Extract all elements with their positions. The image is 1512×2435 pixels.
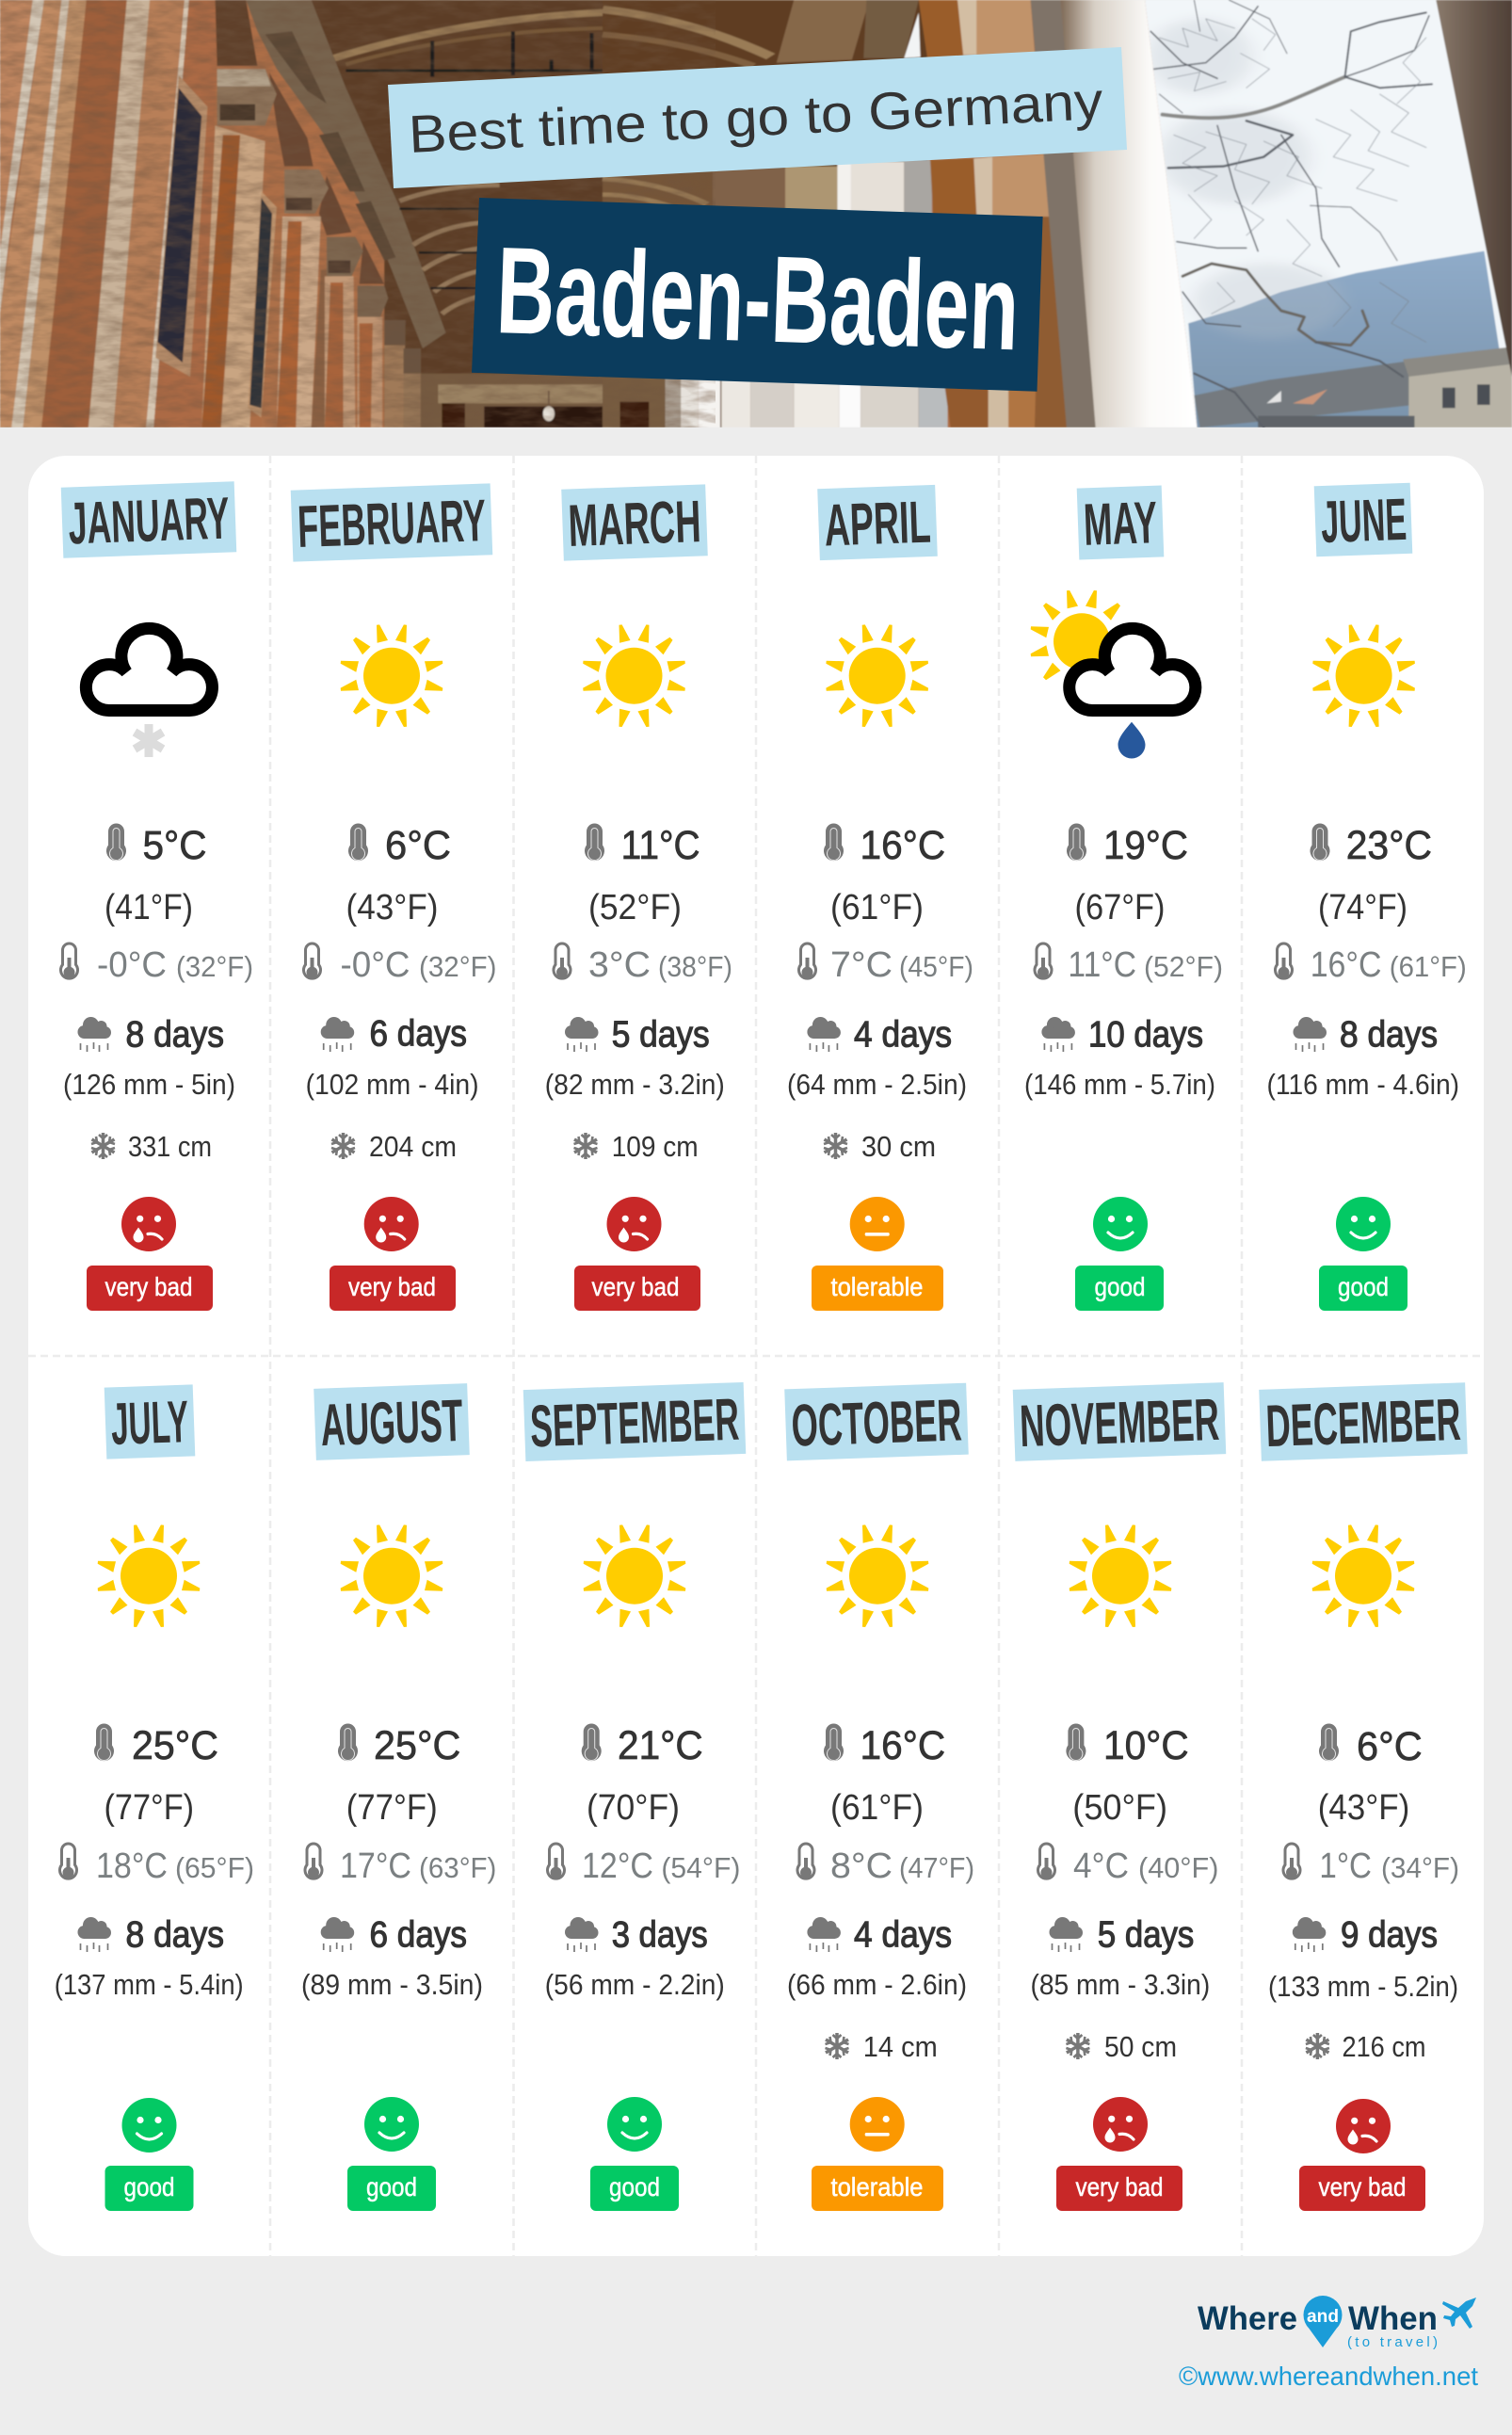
logo: Where and When (to travel): and	[1307, 2307, 1339, 2327]
average high temperature: 11°C	[621, 823, 700, 868]
rainfall: (56 mm - 2.2in)	[545, 1968, 725, 2001]
panel: monthly climate card	[28, 456, 1484, 2256]
average low temperature	[554, 943, 732, 985]
rating: very bad	[330, 1197, 456, 1311]
heading: June	[1314, 483, 1412, 556]
rainfall: (116 mm - 4.6in)	[1267, 1068, 1459, 1101]
average low temperature	[798, 943, 973, 985]
average low temperature: (63°F)	[419, 1851, 496, 1884]
average high temperature: (52°F)	[588, 888, 682, 927]
month: February	[291, 483, 497, 1311]
heading: January: JANUARY	[67, 486, 231, 556]
average high temperature: (61°F)	[830, 888, 924, 927]
average low temperature: 18°C	[96, 1846, 168, 1886]
icon: sun	[826, 624, 928, 727]
heading: April: APRIL	[823, 490, 932, 558]
average low temperature	[60, 943, 253, 985]
snowfall	[574, 1130, 699, 1163]
heading: March: MARCH	[567, 489, 702, 559]
snowfall: 331 cm	[128, 1130, 212, 1163]
month: November	[1013, 1382, 1226, 2211]
heading: August: AUGUST	[319, 1388, 464, 1459]
rating: good	[105, 2098, 194, 2211]
heading: November: NOVEMBER	[1019, 1387, 1220, 1459]
icon: sun	[1312, 1524, 1414, 1627]
average low temperature: 11°C	[1068, 945, 1136, 985]
average high temperature: (50°F)	[1072, 1788, 1167, 1828]
icon: cloud with snow	[86, 628, 212, 757]
average high temperature	[585, 823, 700, 927]
title banner: Baden-Baden	[472, 198, 1043, 392]
average low temperature: (40°F)	[1138, 1851, 1218, 1884]
average high temperature	[338, 1723, 460, 1828]
title banner: Best time to go to Germany: Best time to go to Germany	[408, 71, 1104, 164]
rating: tolerable	[812, 2097, 943, 2211]
rainfall	[1024, 1015, 1215, 1101]
rainfall: 5 days	[612, 1015, 710, 1055]
snowfall: 109 cm	[612, 1130, 699, 1163]
heading: July: JULY	[110, 1389, 189, 1458]
snowfall: 204 cm	[369, 1130, 457, 1163]
month: June	[1267, 483, 1467, 1311]
average high temperature	[105, 823, 207, 927]
rainfall: 4 days	[854, 1015, 952, 1055]
average low temperature	[1283, 1844, 1459, 1886]
average high temperature: (61°F)	[830, 1788, 924, 1828]
average high temperature: (41°F)	[105, 888, 193, 927]
rainfall: (137 mm - 5.4in)	[55, 1968, 244, 2001]
average low temperature: (52°F)	[1144, 950, 1223, 983]
rainfall: 9 days	[1341, 1915, 1438, 1955]
rainfall: (64 mm - 2.5in)	[787, 1068, 967, 1101]
snowfall	[824, 1130, 936, 1163]
average high temperature: 21°C	[618, 1723, 703, 1768]
logo: Where and When (to travel): Where	[1198, 2300, 1297, 2337]
average high temperature: 6°C	[1357, 1724, 1423, 1769]
rating: tolerable: tolerable	[830, 1272, 923, 1301]
average high temperature	[824, 823, 945, 927]
rating: good	[347, 2097, 436, 2211]
average low temperature: (47°F)	[899, 1851, 974, 1884]
rainfall	[301, 1915, 483, 2001]
rating: good	[1075, 1197, 1164, 1311]
average low temperature: 12°C	[582, 1846, 653, 1886]
average low temperature: 1°C	[1319, 1846, 1372, 1886]
average high temperature: 25°C	[374, 1723, 460, 1768]
average high temperature: (43°F)	[346, 888, 439, 927]
heading: April	[817, 485, 938, 560]
logo: Where and When (to travel): (to travel)	[1347, 2334, 1438, 2350]
rainfall: 6 days	[369, 1013, 467, 1055]
snowfall	[1066, 2030, 1177, 2063]
month: October	[784, 1383, 974, 2211]
rainfall: 8 days	[126, 1015, 224, 1055]
average low temperature	[1275, 943, 1467, 985]
average high temperature	[824, 1723, 945, 1828]
snowfall: 14 cm	[863, 2030, 938, 2063]
month: January	[60, 481, 253, 1311]
rainfall: (66 mm - 2.6in)	[787, 1968, 967, 2001]
rating: very bad: very bad	[591, 1272, 680, 1301]
average high temperature: 16°C	[861, 1723, 945, 1768]
rating: good: good	[1338, 1272, 1389, 1301]
rainfall	[545, 1015, 725, 1101]
average low temperature	[797, 1844, 974, 1886]
icon: sun, cloud and rain drop	[1031, 590, 1196, 759]
heading: September	[523, 1382, 746, 1461]
rainfall: (85 mm - 3.3in)	[1030, 1968, 1210, 2001]
average low temperature: (45°F)	[899, 950, 973, 983]
average low temperature: (54°F)	[661, 1851, 740, 1884]
rating: good: good	[366, 2172, 417, 2201]
rainfall	[1268, 1915, 1458, 2003]
rating: good: good	[1094, 1272, 1145, 1301]
rainfall	[306, 1013, 479, 1101]
average low temperature: 16°C	[1311, 945, 1382, 985]
rating: good	[590, 2097, 679, 2211]
average low temperature: 4°C	[1073, 1846, 1129, 1886]
logo: Where and When (to travel)	[1198, 2296, 1476, 2350]
month: December	[1259, 1382, 1468, 2211]
heading: February: FEBRUARY	[297, 488, 487, 560]
icon: sun	[98, 1524, 200, 1627]
average high temperature: (43°F)	[1318, 1788, 1409, 1828]
rainfall	[787, 1015, 967, 1101]
month: May	[1024, 485, 1223, 1311]
rating: very bad: very bad	[348, 1272, 436, 1301]
rainfall	[545, 1915, 725, 2001]
heading: February	[291, 483, 492, 562]
heading: September: SEPTEMBER	[529, 1387, 740, 1459]
average low temperature: (61°F)	[1390, 950, 1467, 983]
rainfall: 4 days	[854, 1915, 952, 1955]
heading: March	[561, 484, 708, 561]
snowfall	[825, 2030, 938, 2063]
title banner: Best time to go to Germany	[388, 47, 1127, 188]
heading: October	[784, 1383, 969, 1460]
rainfall	[63, 1015, 235, 1101]
snowfall: 216 cm	[1343, 2030, 1425, 2063]
average high temperature: 23°C	[1346, 823, 1432, 868]
icon: sun	[341, 624, 442, 727]
month: July	[55, 1384, 254, 2211]
snowfall: 50 cm	[1104, 2030, 1177, 2063]
rainfall	[55, 1915, 244, 2001]
average low temperature	[1035, 943, 1223, 985]
rainfall	[1267, 1015, 1459, 1101]
average low temperature	[548, 1844, 740, 1886]
icon: sun	[827, 1524, 928, 1627]
rating: good	[1319, 1197, 1407, 1311]
average low temperature: (32°F)	[419, 950, 497, 983]
rainfall: (82 mm - 3.2in)	[545, 1068, 725, 1101]
title banner: Baden-Baden: Baden-Baden	[494, 220, 1021, 376]
rainfall: (89 mm - 3.5in)	[301, 1968, 483, 2001]
average high temperature	[1311, 823, 1432, 927]
average high temperature	[1318, 1723, 1423, 1828]
month: September	[523, 1382, 746, 2211]
snowfall	[331, 1130, 457, 1163]
rainfall: (133 mm - 5.2in)	[1268, 1970, 1458, 2003]
average high temperature: (74°F)	[1318, 888, 1407, 927]
month: March	[545, 484, 732, 1311]
rainfall: 5 days	[1098, 1915, 1194, 1955]
rating: very bad	[1299, 2099, 1425, 2211]
average high temperature: (77°F)	[104, 1788, 194, 1828]
snowfall	[1306, 2030, 1425, 2063]
average low temperature	[303, 943, 497, 985]
rating: good: good	[124, 2172, 175, 2201]
average low temperature: -0°C	[341, 945, 410, 985]
rating: very bad: very bad	[1318, 2172, 1407, 2201]
average low temperature: (32°F)	[176, 950, 253, 983]
average high temperature: (70°F)	[587, 1788, 680, 1828]
heading: August	[314, 1383, 470, 1460]
rainfall: 3 days	[612, 1915, 708, 1955]
average low temperature	[305, 1844, 496, 1886]
heading: July	[105, 1384, 195, 1459]
snowfall	[91, 1130, 212, 1163]
logo: Where and When (to travel): When	[1348, 2300, 1438, 2337]
rating: very bad	[87, 1197, 213, 1311]
average high temperature: 10°C	[1103, 1723, 1189, 1768]
rainfall: 8 days	[1340, 1015, 1438, 1055]
average low temperature: 3°C	[588, 945, 651, 985]
heading: November	[1013, 1382, 1226, 1461]
header photo: colonnade with tree and mountain view	[0, 0, 1512, 427]
icon: sun	[1070, 1524, 1171, 1627]
average high temperature: (77°F)	[346, 1788, 438, 1828]
rating: good: good	[609, 2172, 660, 2201]
rainfall: 6 days	[369, 1915, 467, 1955]
rainfall: (146 mm - 5.7in)	[1024, 1068, 1215, 1101]
rainfall: 10 days	[1088, 1015, 1203, 1055]
rainfall: 8 days	[126, 1915, 224, 1955]
rating: tolerable	[812, 1197, 943, 1311]
rainfall	[1030, 1915, 1210, 2001]
rainfall	[787, 1915, 967, 2001]
average low temperature	[1037, 1844, 1218, 1886]
icon: sun	[341, 1524, 442, 1627]
heading: May: MAY	[1083, 490, 1158, 558]
average low temperature: (38°F)	[658, 950, 732, 983]
icon: sun	[584, 1524, 685, 1627]
rating: very bad	[574, 1197, 700, 1311]
average high temperature	[1066, 1723, 1189, 1828]
average high temperature	[1067, 823, 1188, 927]
rating: tolerable: tolerable	[830, 2172, 923, 2201]
month: August	[301, 1383, 496, 2211]
average high temperature: 19°C	[1103, 823, 1188, 868]
average low temperature	[60, 1844, 254, 1886]
rating: very bad: very bad	[105, 1272, 192, 1301]
heading: January	[61, 481, 236, 558]
rating: very bad: very bad	[1075, 2172, 1164, 2201]
average high temperature: 16°C	[861, 823, 945, 868]
heading: June: JUNE	[1320, 487, 1407, 556]
average high temperature	[94, 1723, 218, 1828]
average low temperature: 17°C	[340, 1846, 411, 1886]
average low temperature: (65°F)	[175, 1851, 254, 1884]
icon: sun	[1312, 624, 1415, 727]
average high temperature	[582, 1723, 703, 1828]
average low temperature: 8°C	[830, 1846, 893, 1886]
rainfall: (102 mm - 4in)	[306, 1068, 479, 1101]
average high temperature: 5°C	[143, 823, 207, 868]
rating: very bad	[1056, 2097, 1182, 2211]
average high temperature	[346, 823, 451, 927]
average high temperature: 25°C	[132, 1723, 218, 1768]
snowfall: 30 cm	[861, 1130, 936, 1163]
rainfall: (126 mm - 5in)	[63, 1068, 235, 1101]
copyright website link: ©www.whereandwhen.net	[1179, 2362, 1478, 2391]
heading: May	[1077, 485, 1164, 560]
average high temperature: 6°C	[385, 823, 451, 868]
month: April	[787, 485, 973, 1311]
average low temperature: -0°C	[97, 945, 167, 985]
icon: sun	[583, 624, 685, 727]
average low temperature: (34°F)	[1381, 1851, 1459, 1884]
average low temperature: 7°C	[830, 945, 893, 985]
heading: October: OCTOBER	[790, 1387, 963, 1459]
average high temperature: (67°F)	[1075, 888, 1166, 927]
